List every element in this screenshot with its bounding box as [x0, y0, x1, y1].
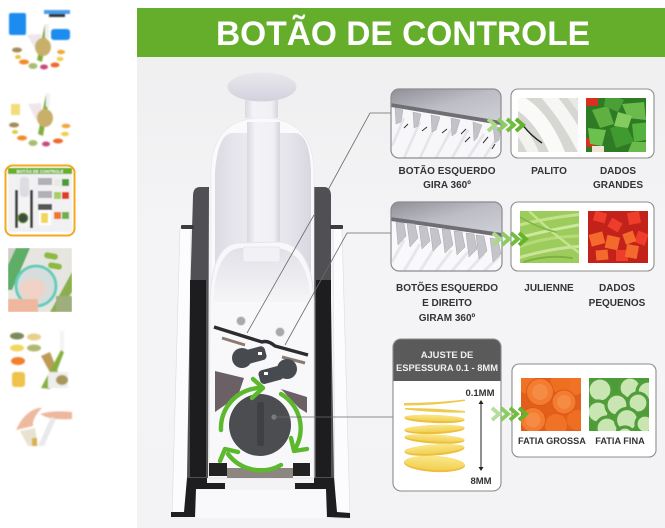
blade close-up 2 — [391, 202, 502, 271]
potato slices — [404, 400, 465, 474]
results box 2 — [511, 202, 654, 271]
label: dados pequenos: PEQUENOS — [589, 298, 646, 309]
bottom tabs — [209, 463, 227, 476]
thumbnail: hand holding glass bowl — [8, 248, 72, 312]
arrows: row 3 — [492, 408, 526, 420]
row 2: both buttons — [391, 202, 654, 324]
blade slot — [214, 327, 308, 355]
arrows: row 2 — [493, 233, 526, 245]
panel header: AJUSTE DE — [421, 349, 473, 360]
panel header: ESPESSURA 0.1 - 8MM — [396, 362, 498, 373]
label: fatia fina: FATIA FINA — [595, 436, 645, 446]
windows — [215, 371, 244, 412]
title banner: BOTÃO DE CONTROLE — [216, 15, 590, 53]
label: botões esquerdo e direito: GIRAM 360º — [419, 313, 476, 324]
label: dados grandes: GRANDES — [593, 180, 643, 191]
dark side rails — [187, 187, 209, 478]
label: palito: PALITO — [531, 166, 567, 177]
thumbnail: product with potato stack — [9, 93, 70, 146]
thickness panel — [393, 339, 501, 491]
image: fatia grossa — [521, 378, 581, 431]
title banner — [137, 8, 665, 57]
hopper — [211, 118, 314, 300]
thumbnail gallery — [6, 10, 74, 446]
image: fatia fina — [589, 378, 649, 431]
label: julienne: JULIENNE — [524, 283, 574, 294]
lower body — [209, 242, 314, 478]
right blade knob — [258, 359, 297, 385]
thumbnail: selected, control button: BOTÃO DE CONTROLE — [17, 169, 64, 174]
thickness arrow — [478, 400, 484, 471]
dial — [221, 386, 299, 464]
label: botão esquerdo: GIRA 360º — [423, 180, 471, 191]
label: botões esquerdo e direito: E DIREITO — [422, 298, 472, 309]
panel header — [393, 339, 501, 381]
image: palito — [518, 98, 578, 152]
image: julienne — [520, 211, 579, 263]
label: dados grandes: DADOS — [600, 166, 636, 177]
product: mandoline slicer — [171, 72, 350, 518]
thumbnail: selected, control button — [6, 166, 74, 236]
image: dados grandes — [586, 98, 646, 152]
label: botões esquerdo e direito: BOTÕES ESQUERDO — [396, 281, 498, 294]
thumbnail: product with vegetables and badges — [9, 10, 70, 70]
row 3: thickness adjustment — [393, 339, 659, 491]
left blade knob — [232, 345, 267, 368]
rotation arrows — [220, 379, 307, 470]
label: 8mm: 8MM — [470, 476, 492, 487]
base — [196, 490, 326, 518]
pusher rod — [247, 122, 280, 247]
label: botão esquerdo: BOTÃO ESQUERDO — [398, 164, 496, 177]
results box 3 — [512, 364, 659, 457]
handle knob — [228, 72, 296, 102]
handle stem — [245, 100, 278, 118]
label: 0.1mm: 0.1MM — [465, 388, 495, 399]
label: fatia grossa: FATIA GROSSA — [518, 436, 586, 446]
thumbnail: product and slice samples — [10, 331, 68, 389]
label: dados pequenos: DADOS — [599, 283, 635, 294]
image: dados pequenos — [588, 211, 649, 263]
arrows: row 1 — [488, 119, 523, 131]
leader lines — [247, 113, 393, 417]
thumbnail: hands pressing the slicer — [16, 408, 72, 446]
blade close-up 1 — [391, 89, 501, 158]
white outer frame — [172, 228, 191, 518]
screws — [236, 316, 246, 326]
results box 1 — [508, 89, 654, 160]
row 1: left button — [391, 89, 654, 191]
main panel — [137, 8, 665, 528]
